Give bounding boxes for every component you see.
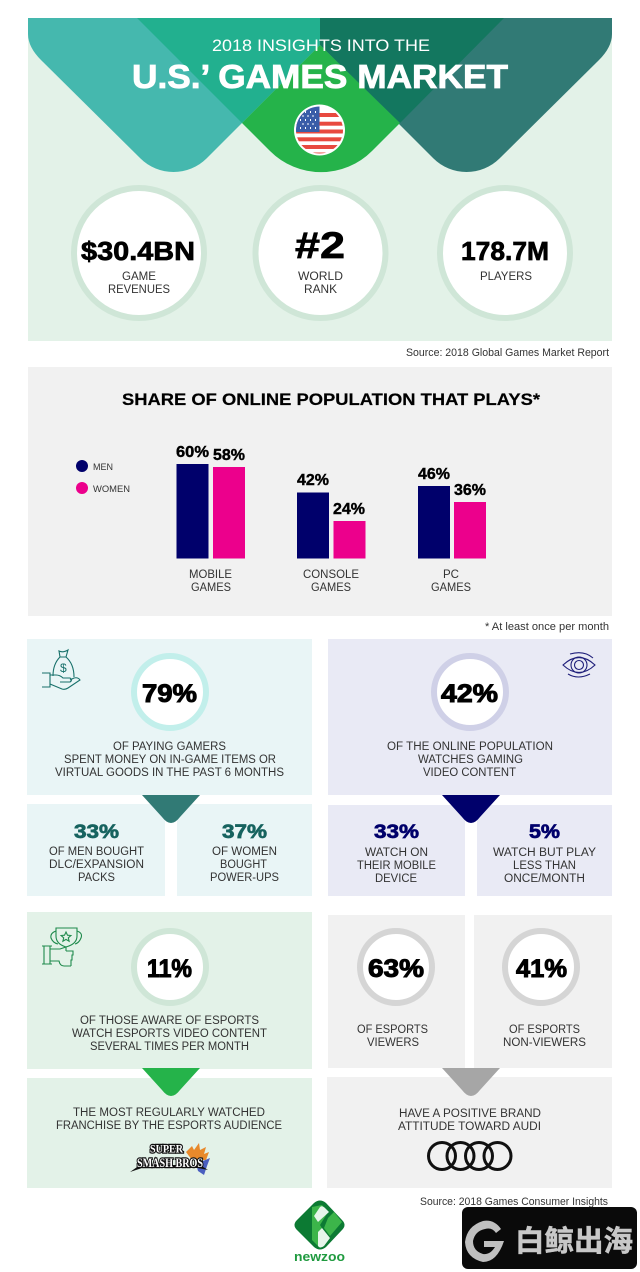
- bar chart: 36%: [454, 482, 486, 499]
- stat: world rank: [256, 188, 386, 318]
- bar chart: GAMES: [191, 582, 231, 594]
- bar chart: MOBILE: [189, 569, 232, 581]
- bar chart: PC: [443, 569, 459, 581]
- logo: Super Smash Bros: [130, 1142, 210, 1175]
- stat: world rank: WORLD: [298, 271, 343, 283]
- icon: trophy in hand: [42, 928, 82, 966]
- panel: esports viewers: 11%: [147, 955, 192, 983]
- description: aware of esports: WATCH ESPORTS VIDEO CONTENT: [72, 1028, 267, 1040]
- stat: men bought: OF MEN BOUGHT: [49, 846, 144, 858]
- footnote: * At least once per month: [485, 621, 609, 633]
- description: paying gamers: [55, 741, 284, 779]
- stat: world rank: #2: [295, 225, 345, 266]
- description: paying gamers: OF PAYING GAMERS: [113, 741, 226, 753]
- logo: Super Smash Bros: SMASH BROS: [137, 1155, 203, 1170]
- arrow: grey: [442, 1068, 500, 1096]
- panel: paying gamers: 79%: [142, 680, 197, 708]
- description: online population: OF THE ONLINE POPULATION: [387, 741, 553, 753]
- stat: world rank: RANK: [304, 284, 337, 296]
- stat ring: 79%: [134, 656, 206, 728]
- icon: US flag: [294, 104, 345, 156]
- panel: share of online population: [28, 367, 612, 616]
- stat ring: 63%: [360, 931, 432, 1003]
- legend: WOMEN: [93, 484, 130, 494]
- description: Audi: ATTITUDE TOWARD AUDI: [398, 1121, 541, 1133]
- panel: video watchers: 42%: [441, 680, 498, 708]
- stat: women bought: 37%: [222, 821, 267, 843]
- stat: players: [440, 188, 570, 318]
- description: franchise: THE MOST REGULARLY WATCHED: [73, 1107, 265, 1119]
- stat: men bought: PACKS: [78, 872, 115, 884]
- panel: esports brand attitude: 41%: [516, 955, 567, 983]
- source: consumer insights: Source: 2018 Games Consumer Insights: [420, 1196, 608, 1208]
- bar chart: 42%: [297, 472, 329, 489]
- stat: watch on mobile: WATCH ON: [365, 847, 428, 859]
- panel: video watchers: [328, 639, 612, 896]
- description: paying gamers: SPENT MONEY ON IN-GAME ITEMS OR: [64, 754, 276, 766]
- arrow: navy: [442, 795, 500, 823]
- description: franchise: [56, 1107, 282, 1132]
- bar chart: GAMES: [311, 582, 351, 594]
- stat ring: 42%: [434, 656, 506, 728]
- bar chart: 46%: [418, 466, 450, 483]
- panel: esports brand attitude: [327, 915, 612, 1188]
- label: esports viewers: [357, 1024, 428, 1049]
- bar chart: [176, 444, 486, 594]
- description: aware of esports: OF THOSE AWARE OF ESPORTS: [80, 1015, 259, 1027]
- stat: game revenues: GAME: [122, 271, 156, 283]
- stat: women bought: OF WOMEN: [212, 846, 277, 858]
- stat: women bought: [210, 821, 279, 884]
- stat: watch but play less: [493, 821, 596, 885]
- label: esports non-viewers: [503, 1024, 586, 1049]
- label: esports viewers: VIEWERS: [367, 1037, 419, 1049]
- bar chart: CONSOLE: [303, 569, 359, 581]
- left overlap band: [137, 18, 320, 123]
- stat: game revenues: $30.4BN: [81, 236, 195, 266]
- legend: MEN: [93, 462, 113, 472]
- logo: newzoo: newzoo: [294, 1249, 345, 1264]
- stat ring: 41%: [505, 931, 577, 1003]
- icon: whale G: [465, 1221, 504, 1262]
- bar chart: 58%: [213, 447, 245, 464]
- chart title: SHARE OF ONLINE POPULATION THAT PLAYS*: [122, 390, 540, 409]
- bar chart: 60%: [176, 444, 209, 461]
- stat: men bought: [49, 821, 144, 884]
- stat: players: PLAYERS: [480, 271, 532, 283]
- icon: eye: [563, 653, 595, 677]
- stat: watch but play less: LESS THAN: [513, 860, 576, 872]
- logo: Audi rings: [428, 1142, 511, 1170]
- arrow: green: [142, 1068, 200, 1096]
- stat: women bought: POWER-UPS: [210, 872, 279, 884]
- icon: money bag in hand: [42, 650, 80, 689]
- panel: market header: [28, 18, 612, 341]
- stat: game revenues: REVENUES: [108, 284, 170, 296]
- panel: paying gamers: [27, 639, 312, 896]
- panel: esports brand attitude: 63%: [368, 955, 424, 983]
- description: online population: [387, 741, 553, 779]
- description: online population: WATCHES GAMING: [418, 754, 523, 766]
- stat: watch on mobile: 33%: [374, 821, 419, 843]
- stat: watch but play less: WATCH BUT PLAY: [493, 847, 596, 859]
- bar chart: GAMES: [431, 582, 471, 594]
- description: aware of esports: SEVERAL TIMES PER MONTH: [90, 1041, 249, 1053]
- description: franchise: FRANCHISE BY THE ESPORTS AUDIENCE: [56, 1120, 282, 1132]
- bar chart: 24%: [333, 501, 365, 518]
- icon: money bag in hand: $: [60, 661, 67, 675]
- stat: watch but play less: ONCE/MONTH: [504, 873, 585, 885]
- description: paying gamers: VIRTUAL GOODS IN THE PAST 6 MONTHS: [55, 767, 284, 779]
- stat: game revenues: [74, 188, 204, 318]
- title line one: 2018 INSIGHTS INTO THE: [212, 36, 430, 55]
- stat: men bought: 33%: [74, 821, 119, 843]
- watermark: 白鲸出海: [515, 1225, 633, 1258]
- right dark chevron: [293, 18, 612, 172]
- label: esports non-viewers: NON-VIEWERS: [503, 1037, 586, 1049]
- stat: watch on mobile: THEIR MOBILE: [357, 860, 436, 872]
- right overlap band: [320, 18, 504, 123]
- logo: Super Smash Bros: SUPER: [150, 1142, 183, 1156]
- stat: watch on mobile: [357, 821, 436, 885]
- stat: players: 178.7M: [461, 236, 549, 266]
- stat: watch on mobile: DEVICE: [375, 873, 417, 885]
- stat: women bought: BOUGHT: [220, 859, 267, 871]
- left teal chevron: [28, 18, 347, 172]
- description: Audi: [398, 1108, 541, 1133]
- source: market report: Source: 2018 Global Games Market Report: [406, 347, 609, 359]
- description: aware of esports: [72, 1015, 267, 1053]
- title line two: U.S.’ GAMES MARKET: [132, 58, 508, 95]
- description: online population: VIDEO CONTENT: [423, 767, 516, 779]
- panel: esports viewers: [27, 912, 312, 1188]
- legend: [76, 460, 130, 494]
- watermark: [462, 1207, 637, 1269]
- stat: watch but play less: 5%: [529, 821, 560, 843]
- description: Audi: HAVE A POSITIVE BRAND: [399, 1108, 541, 1120]
- stat: men bought: DLC/EXPANSION: [49, 859, 144, 871]
- label: esports non-viewers: OF ESPORTS: [509, 1024, 580, 1036]
- logo: newzoo: [294, 1200, 345, 1264]
- centre green chevron: [242, 45, 400, 172]
- arrow: teal: [142, 795, 200, 823]
- label: esports viewers: OF ESPORTS: [357, 1024, 428, 1036]
- stat ring: 11%: [134, 931, 206, 1003]
